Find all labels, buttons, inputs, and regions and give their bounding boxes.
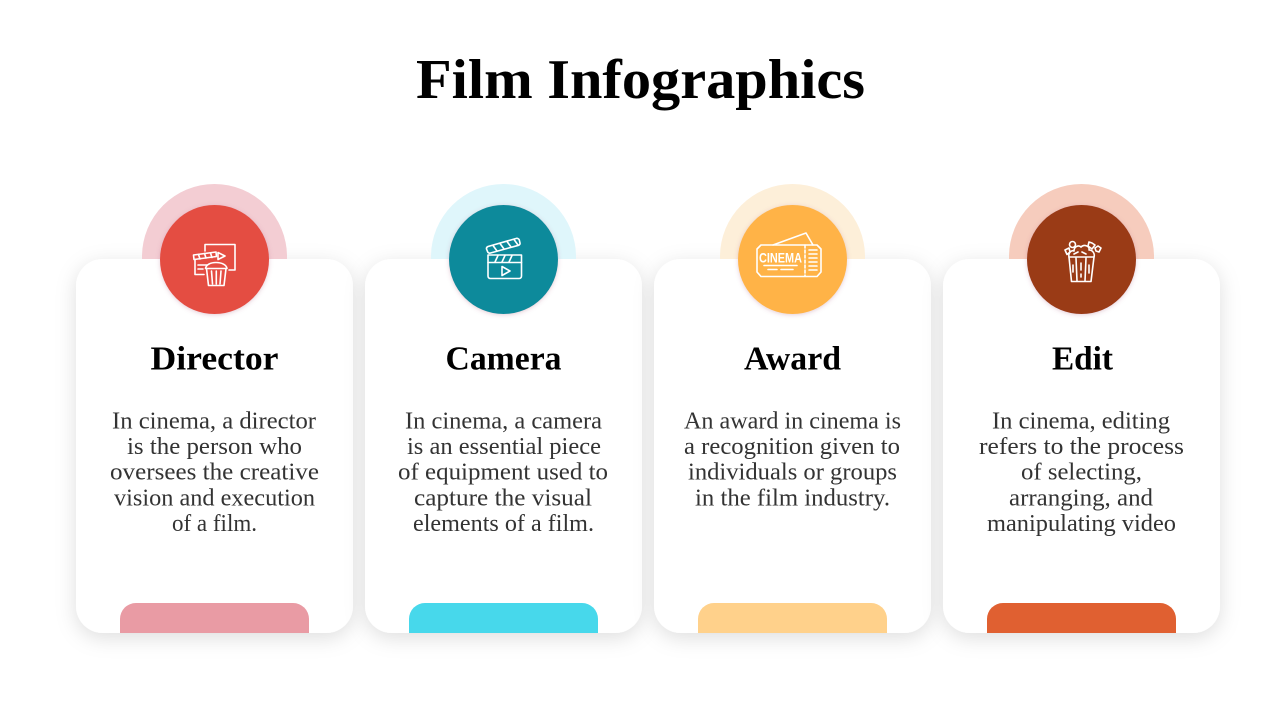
- accent tab: award: [698, 603, 887, 633]
- panel: award: [654, 184, 931, 633]
- accent tab: camera: [409, 603, 598, 633]
- text: award: in the film industry.: [695, 485, 890, 511]
- halo: edit: [1009, 184, 1154, 259]
- text: edit: manipulating video: [987, 511, 1176, 537]
- icon badge: edit: [1027, 205, 1136, 314]
- heading: award: Award: [744, 340, 841, 378]
- heading: camera: Camera: [446, 340, 562, 378]
- heading: director: Director: [150, 340, 279, 378]
- icon: popcorn: [1065, 242, 1101, 282]
- text: camera: elements of a film.: [413, 511, 594, 537]
- card: camera: [365, 259, 642, 633]
- halo: director: [142, 184, 287, 259]
- text: camera: [398, 408, 608, 537]
- icon badge: director: [160, 205, 269, 314]
- text: edit: of selecting,: [1021, 460, 1142, 486]
- icon label: CINEMA: [759, 250, 802, 266]
- text: camera: is an essential piece: [407, 434, 601, 460]
- card: director: [76, 259, 353, 633]
- text: camera: of equipment used to: [398, 460, 608, 486]
- text: award: [684, 408, 901, 511]
- text: edit: refers to the process: [979, 434, 1184, 460]
- icon: film and popcorn: [194, 244, 235, 286]
- halo: camera: [431, 184, 576, 259]
- accent tab: edit: [987, 603, 1176, 633]
- panel: director: [76, 184, 353, 633]
- text: edit: In cinema, editing: [992, 408, 1170, 434]
- icon: cinema ticket: [757, 233, 821, 276]
- panel: camera: [365, 184, 642, 633]
- accent tab: director: [120, 603, 309, 633]
- icon badge: camera: [449, 205, 558, 314]
- text: director: [110, 408, 319, 537]
- text: camera: In cinema, a camera: [405, 408, 602, 434]
- text: camera: capture the visual: [414, 485, 592, 511]
- text: edit: [979, 408, 1184, 537]
- text: director: vision and execution: [114, 485, 315, 511]
- card: edit: [943, 259, 1220, 633]
- halo: award: [720, 184, 865, 259]
- text: award: a recognition given to: [684, 434, 900, 460]
- heading: edit: Edit: [1052, 340, 1114, 378]
- card: award: [654, 259, 931, 633]
- icon badge: award: [738, 205, 847, 314]
- text: director: is the person who: [127, 434, 302, 460]
- text: director: of a film.: [172, 511, 257, 537]
- title: Film Infographics: [416, 49, 865, 111]
- text: director: In cinema, a director: [112, 408, 316, 434]
- panel: edit: [943, 184, 1220, 633]
- text: director: oversees the creative: [110, 460, 319, 486]
- text: edit: arranging, and: [1009, 485, 1153, 511]
- text: award: An award in cinema is: [684, 408, 901, 434]
- text: award: individuals or groups: [688, 460, 897, 486]
- icon: clapperboard: [486, 238, 522, 278]
